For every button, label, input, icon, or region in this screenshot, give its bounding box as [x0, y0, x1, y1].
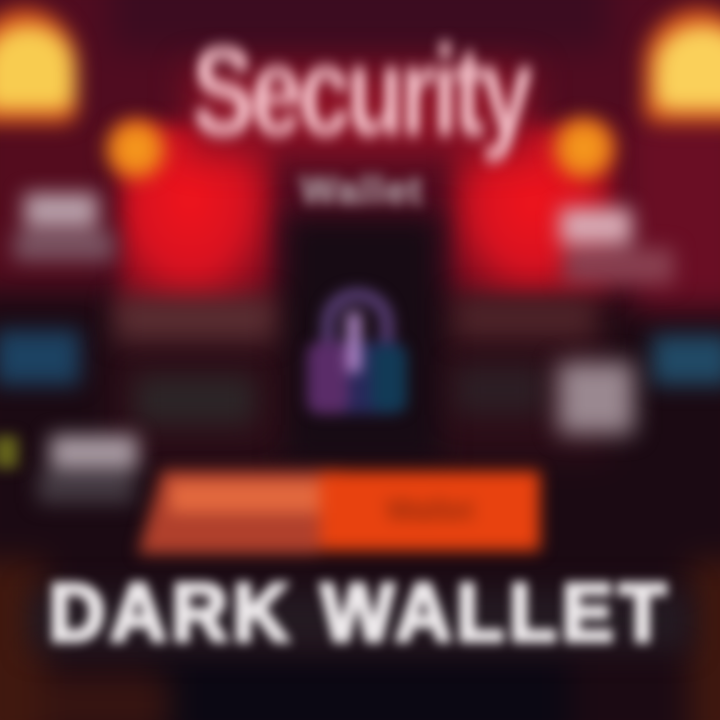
title glow	[190, 70, 530, 155]
panel: lower left label	[30, 420, 152, 512]
heading: dark wallet: DARK WALLET	[49, 566, 671, 658]
heading glow	[30, 590, 690, 650]
banner: right orange section	[320, 471, 540, 551]
panel: lower right label	[558, 362, 634, 434]
panel: left blue label	[0, 330, 80, 385]
title: Security	[192, 22, 528, 162]
panel: middle right text	[455, 298, 595, 338]
panel: upper right label	[545, 192, 682, 295]
centre dark column	[285, 215, 440, 465]
icon: small green mark	[0, 436, 18, 468]
orange light: left	[105, 118, 167, 180]
banner: highlight text	[170, 481, 320, 513]
lamp: top left	[0, 0, 93, 138]
banner: right orange section: Wallet	[386, 494, 474, 527]
banner	[129, 458, 553, 566]
lamp bulb	[655, 26, 720, 110]
panel: upper left label	[3, 178, 125, 272]
panel: middle left text	[115, 298, 275, 340]
lamp glow	[0, 8, 78, 124]
orange light: right	[552, 116, 616, 180]
icon: padlock	[298, 280, 414, 422]
lamp glow	[643, 8, 720, 124]
panel: right blue label	[652, 335, 720, 385]
panel: lower left muted text	[135, 375, 255, 425]
subtitle: Wallet	[301, 170, 423, 212]
red glow: left	[120, 125, 275, 310]
panel: lower right muted text	[455, 365, 545, 415]
red glow: right	[450, 125, 615, 300]
lamp bulb	[0, 26, 74, 110]
lamp: top right	[628, 0, 720, 138]
banner: left salmon section	[138, 470, 342, 554]
